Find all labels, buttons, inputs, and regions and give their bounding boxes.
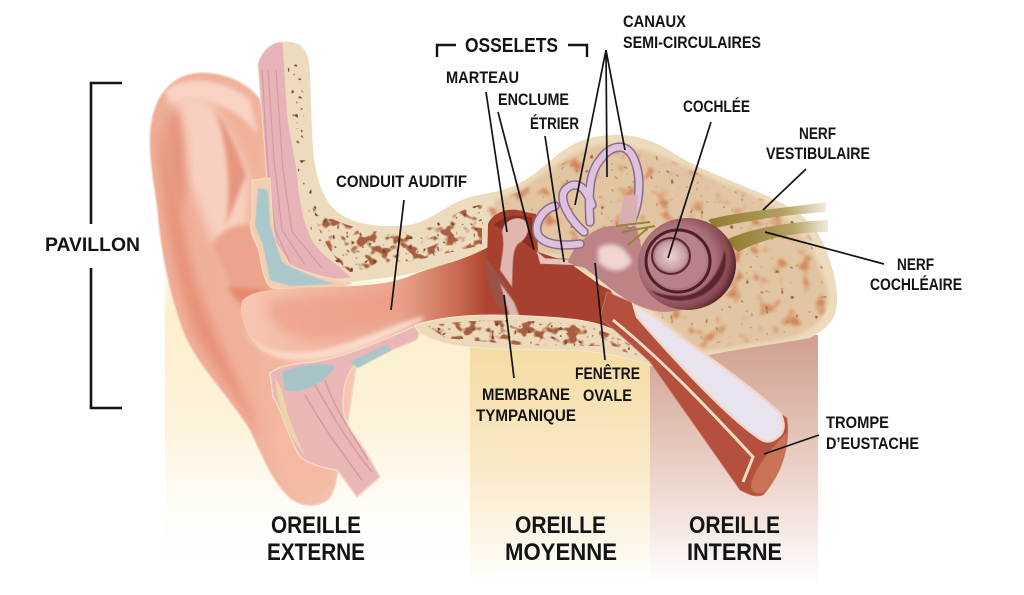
leader: nerf cochléaire	[765, 232, 884, 264]
label: fenêtre ovale: FENÊTRE	[575, 364, 640, 383]
label: enclume: ENCLUME	[498, 91, 569, 109]
leader lines	[391, 50, 884, 454]
leader: marteau	[486, 92, 507, 232]
leader: étrier	[545, 136, 564, 262]
leader: canaux	[575, 50, 625, 205]
leader: conduit auditif	[391, 200, 404, 310]
label: membrane tympanique	[476, 386, 576, 425]
label: osselets: OSSELETS	[465, 35, 558, 57]
pink tissue behind canal, upper	[258, 42, 352, 282]
leader: membrane tympanique	[504, 295, 514, 378]
leader: enclume	[498, 112, 534, 250]
heading: oreille moyenne: MOYENNE	[505, 539, 617, 566]
label: canaux semi-circulaires	[623, 13, 761, 52]
vestibule	[568, 226, 690, 312]
eustachian tube	[600, 292, 788, 496]
upper cartilage	[250, 178, 352, 290]
cochlea	[638, 218, 736, 310]
middle ear: cavity and tympanic membrane	[485, 210, 640, 345]
label: nerf vestibulaire: VESTIBULAIRE	[766, 145, 870, 163]
label: nerf cochléaire: COCHLÉAIRE	[870, 275, 962, 294]
label: fenêtre ovale	[575, 364, 640, 405]
background: column inner ear	[650, 335, 818, 585]
heading: oreille moyenne: OREILLE	[515, 512, 606, 539]
label: membrane tympanique: TYMPANIQUE	[476, 407, 576, 425]
canal loops	[537, 147, 639, 245]
malleus	[500, 218, 528, 287]
mottling: spots left	[288, 64, 482, 272]
label: membrane tympanique: MEMBRANE	[482, 386, 570, 404]
label: cochlée: COCHLÉE	[683, 97, 750, 116]
bracket: pavillon	[91, 83, 122, 408]
bone: temporal bone with mottling	[262, 42, 840, 360]
inner ear: semicircular canals and vestibule	[537, 147, 690, 312]
nerves	[616, 202, 828, 252]
stapes and incus	[536, 250, 590, 266]
heading: oreille moyenne	[505, 512, 617, 566]
background: column middle ear	[470, 345, 650, 585]
leader: fenêtre ovale	[595, 263, 605, 360]
heading: oreille interne	[687, 512, 782, 566]
label: pavillon: PAVILLON	[45, 235, 140, 256]
label: trompe d'eustache: TROMPE	[826, 414, 889, 432]
label: fenêtre ovale: OVALE	[583, 387, 632, 405]
leader: cochlée	[668, 122, 711, 258]
pinna: outer ear	[150, 73, 360, 505]
leader: trompe	[764, 435, 819, 454]
label: marteau: MARTEAU	[446, 69, 519, 87]
lower tissue and cartilage	[270, 323, 423, 497]
heading: oreille externe: EXTERNE	[267, 539, 365, 566]
label: canaux semi-circulaires: SEMI-CIRCULAIRES	[623, 34, 761, 52]
background: column outer ear	[165, 240, 470, 585]
heading: oreille externe: OREILLE	[271, 512, 361, 539]
label: nerf vestibulaire	[766, 125, 870, 163]
label: canaux semi-circulaires: CANAUX	[623, 13, 686, 31]
bracket: osselets	[437, 45, 587, 57]
tympanic membrane	[485, 257, 523, 320]
lower bone strip	[414, 314, 653, 367]
label: nerf cochléaire	[870, 256, 962, 294]
heading: oreille interne: OREILLE	[689, 512, 780, 539]
label: conduit auditif: CONDUIT AUDITIF	[336, 173, 467, 191]
label: trompe d'eustache	[826, 414, 919, 453]
leader: nerf vestibulaire	[763, 169, 806, 210]
ear canal	[240, 246, 650, 360]
label: étrier: ÉTRIER	[530, 114, 579, 133]
label: nerf vestibulaire: NERF	[799, 125, 836, 143]
heading: oreille externe	[267, 512, 365, 566]
heading: oreille interne: INTERNE	[687, 539, 782, 566]
label: nerf cochléaire: NERF	[897, 256, 934, 274]
mottling: spots right	[482, 152, 827, 348]
label: trompe d'eustache: D’EUSTACHE	[826, 435, 919, 453]
